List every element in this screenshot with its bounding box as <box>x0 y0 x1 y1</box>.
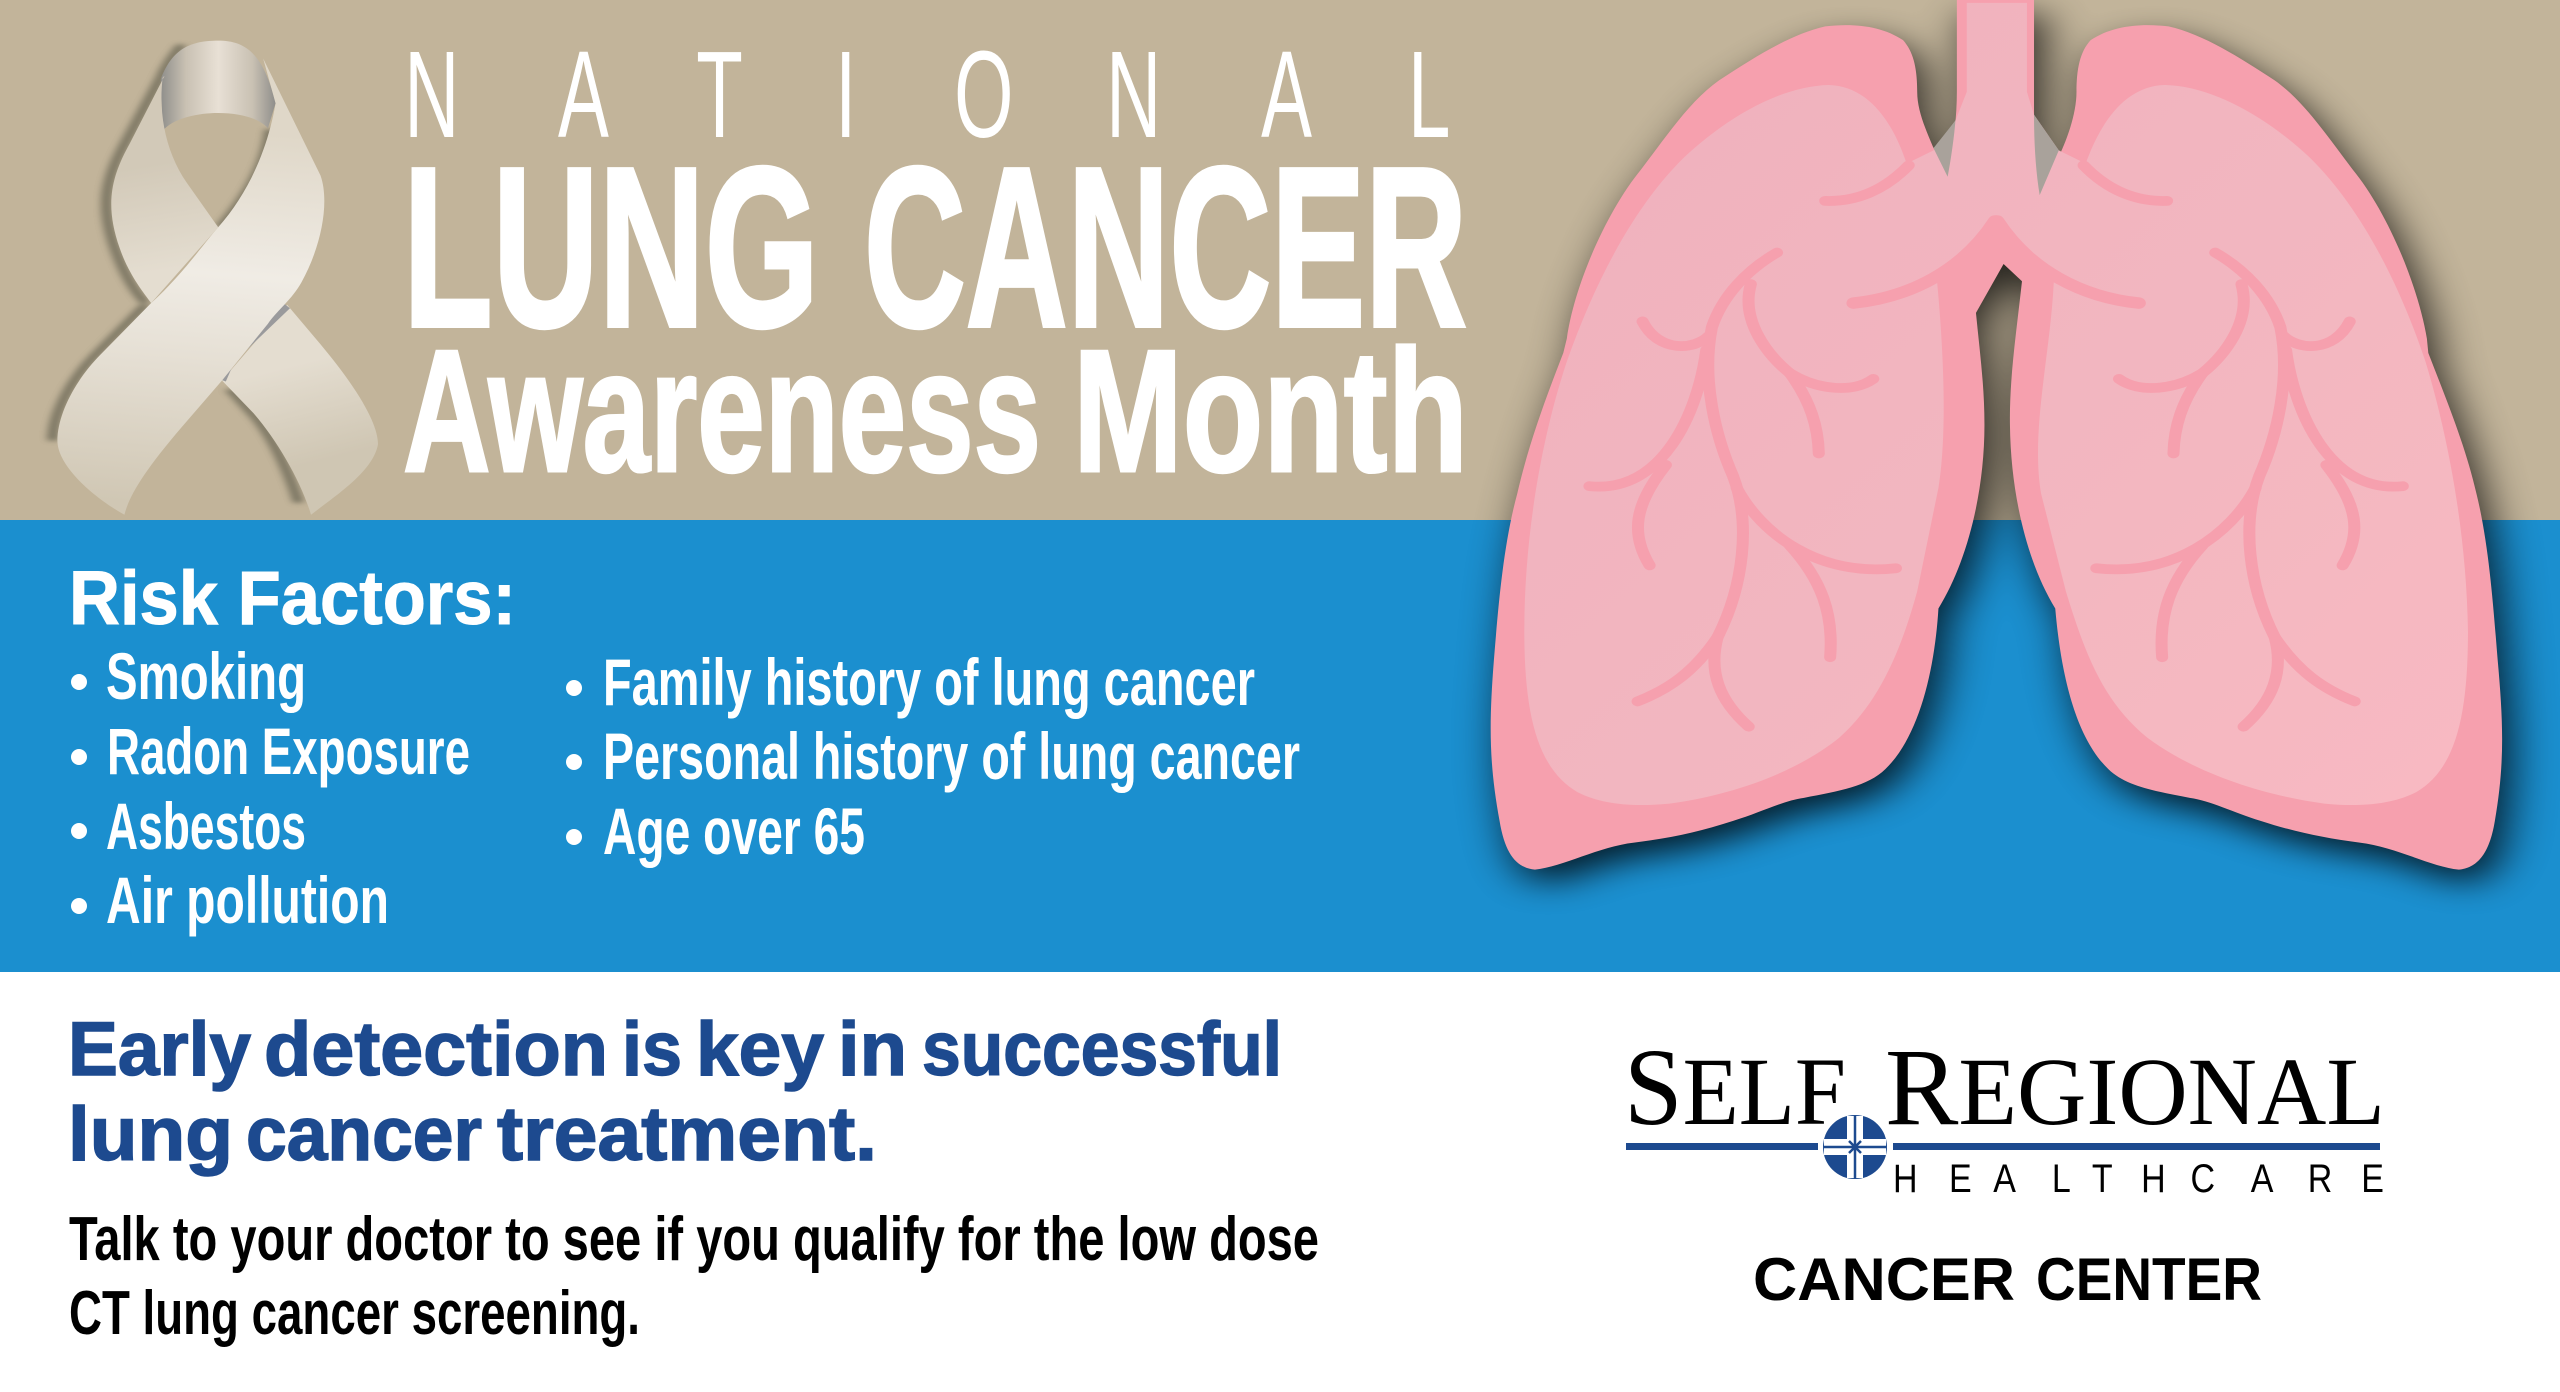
bullet item: Asbestos: Asbestos <box>106 789 306 863</box>
heading: early detection message: successful <box>922 1007 1282 1092</box>
panel: tan header band <box>0 0 2560 520</box>
lungs drop shadow <box>1501 14 2512 883</box>
bullet item: Radon Exposure: Radon Exposure <box>107 714 470 788</box>
bullet item: Air pollution <box>71 863 389 937</box>
bullet item: Smoking <box>71 639 306 713</box>
heading: early detection message: in <box>838 1007 907 1092</box>
title line: Awareness Month: Awareness <box>403 313 1041 508</box>
left lung bronchi <box>1589 165 1995 727</box>
bullet item: Air pollution: Air pollution <box>106 863 389 937</box>
bullet item: Age over 65 <box>566 794 865 868</box>
text block: screening advice: Talk to your doctor to see if you qualify for the low dose <box>69 1205 1319 1274</box>
title line: LUNG CANCER: CANCER <box>864 121 1467 375</box>
panel: white footer band <box>0 972 2560 1392</box>
text block: screening advice <box>69 1205 1319 1348</box>
label: Cancer Center <box>1753 1246 2262 1313</box>
panel: blue risk factors band <box>0 520 2560 972</box>
heading: early detection message: lung <box>68 1092 233 1177</box>
heading: early detection message: is <box>622 1007 682 1092</box>
label: Cancer Center: CANCER <box>1753 1246 2015 1313</box>
bullet item: Personal history: Personal history of lung cancer <box>603 719 1300 793</box>
bullet item: Radon Exposure <box>71 714 470 788</box>
bullet item: Family history <box>566 645 1255 719</box>
heading: early detection message: treatment. <box>497 1092 877 1177</box>
logo rule left <box>1626 1143 1818 1150</box>
logo emblem: cross in circle <box>1823 1115 1887 1179</box>
logo subtitle: Healthcare: HEALTHCARE <box>1893 1155 2384 1201</box>
lungs inner highlight with trachea <box>1524 3 2468 805</box>
heading: early detection message: detection <box>264 1007 608 1092</box>
logo rule right <box>1893 1143 2380 1150</box>
logo wordmark: Regional: REGIONAL <box>1885 1026 2385 1148</box>
heading: early detection message <box>68 1007 1282 1177</box>
title line: LUNG CANCER <box>403 121 1467 375</box>
title line: LUNG CANCER: LUNG <box>403 121 819 375</box>
list: risk factors left column <box>71 639 470 937</box>
icon: lungs illustration <box>1491 0 2512 883</box>
trachea overlap translucent wedges <box>1933 115 2059 195</box>
list: risk factors right column <box>566 645 1300 868</box>
title: National Lung Cancer Awareness Month <box>403 25 1468 508</box>
logo: Self Regional Healthcare <box>1624 1026 2385 1201</box>
right lung bronchi <box>1997 165 2403 727</box>
lungs outer shape <box>1491 0 2502 870</box>
heading: early detection message: Early <box>68 1007 251 1092</box>
heading: Risk Factors: Risk Factors: <box>69 556 516 641</box>
title line: Awareness Month: Month <box>1073 313 1468 508</box>
heading: early detection message: cancer <box>246 1092 482 1177</box>
logo wordmark: Self: SELF <box>1624 1026 1846 1148</box>
label: Cancer Center: CENTER <box>2036 1246 2262 1313</box>
bullet item: Smoking: Smoking <box>106 639 306 713</box>
text block: screening advice: CT lung cancer screening. <box>69 1279 640 1348</box>
bullet item: Asbestos <box>71 789 306 863</box>
bullet item: Family history: Family history of lung cancer <box>603 645 1255 719</box>
icon: awareness ribbon <box>53 41 378 515</box>
title line: NATIONAL: NATIONAL <box>404 25 1450 163</box>
heading: early detection message: key <box>696 1007 824 1092</box>
bullet item: Age over 65: Age over 65 <box>603 794 865 868</box>
bullet item: Personal history <box>566 719 1300 793</box>
